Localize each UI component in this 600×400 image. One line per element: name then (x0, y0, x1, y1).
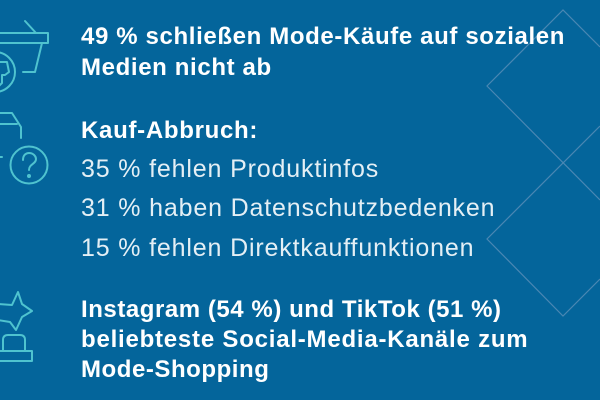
icon: tag and question mark (0, 112, 48, 184)
heading: purchase abandonment: Kauf-Abbruch: (81, 117, 258, 144)
icon: shopping basket (0, 20, 49, 92)
stat: direct purchase: 15 % fehlen Direktkauffunktionen (81, 234, 474, 262)
stat: product info: 35 % fehlen Produktinfos (81, 155, 379, 183)
heading: favourite channels (81, 296, 528, 383)
icon: star trophy (0, 291, 33, 362)
heading: favourite channels: Mode-Shopping (81, 356, 269, 383)
heading: abandoned purchases (81, 23, 565, 81)
stat: data privacy: 31 % haben Datenschutzbedenken (81, 194, 495, 222)
heading: abandoned purchases: 49 % schließen Mode-Käufe auf sozialen (81, 23, 565, 50)
heading: favourite channels: Instagram (54 %) und TikTok (51 %) (81, 296, 502, 323)
heading: favourite channels: beliebteste Social-Media-Kanäle zum (81, 326, 528, 353)
heading: abandoned purchases: Medien nicht ab (81, 54, 272, 81)
